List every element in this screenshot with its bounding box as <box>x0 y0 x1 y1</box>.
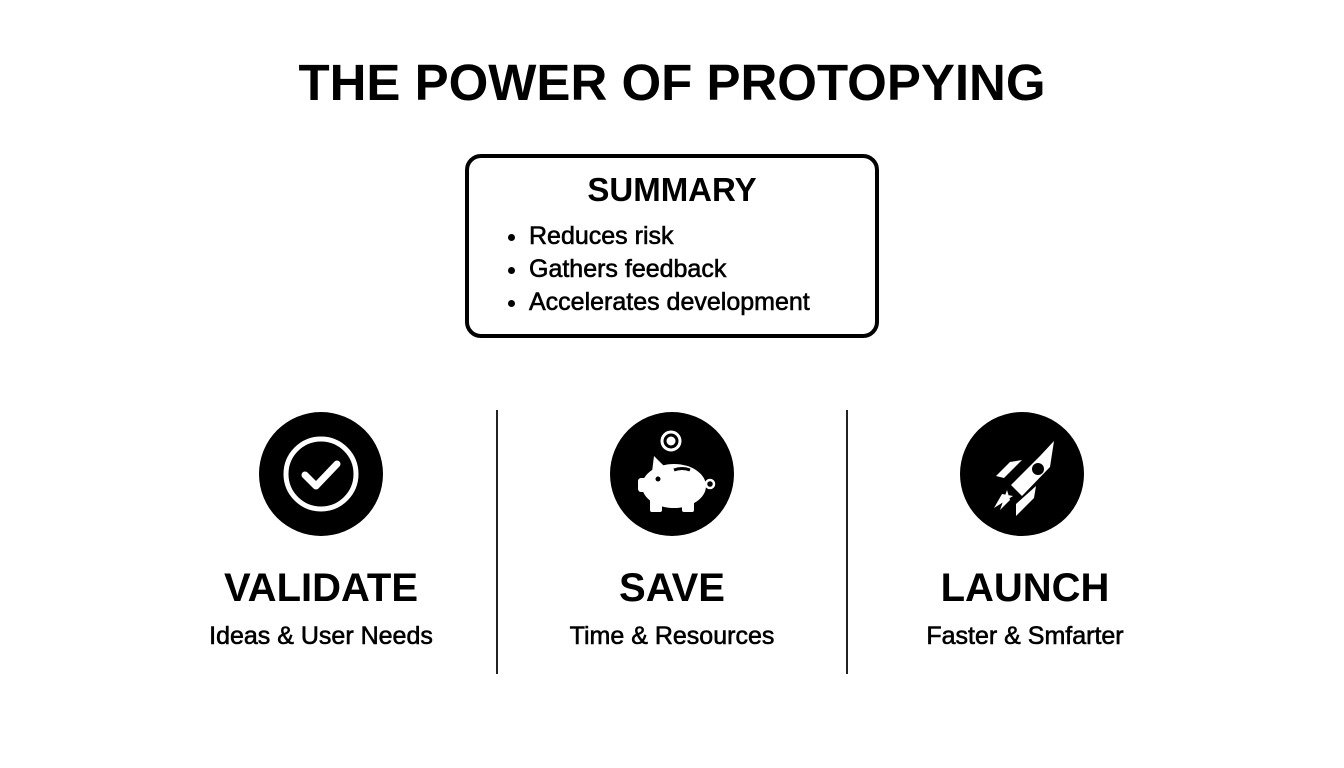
subtitle: validate: Ideas & User Needs <box>209 622 433 650</box>
summary bullet list: Gathers feedback <box>529 255 726 283</box>
column: save <box>570 566 774 650</box>
icon: piggy bank <box>610 412 734 536</box>
heading: save: SAVE <box>619 566 725 610</box>
heading: launch: LAUNCH <box>941 566 1109 610</box>
icon: check <box>259 412 383 536</box>
icon: rocket <box>960 412 1084 536</box>
subtitle: save: Time & Resources <box>570 622 774 650</box>
subtitle: launch: Faster & Smfarter <box>926 622 1124 650</box>
summary bullet list <box>508 222 810 316</box>
summary bullet list: Reduces risk <box>529 222 674 250</box>
heading: validate: VALIDATE <box>224 566 418 610</box>
column: launch <box>926 566 1124 650</box>
summary bullet list: Accelerates development <box>529 288 810 316</box>
title: THE POWER OF PROTOPYING <box>298 54 1046 111</box>
summary heading: SUMMARY <box>587 171 757 208</box>
column: validate <box>209 566 433 650</box>
panel: summary <box>465 154 879 338</box>
